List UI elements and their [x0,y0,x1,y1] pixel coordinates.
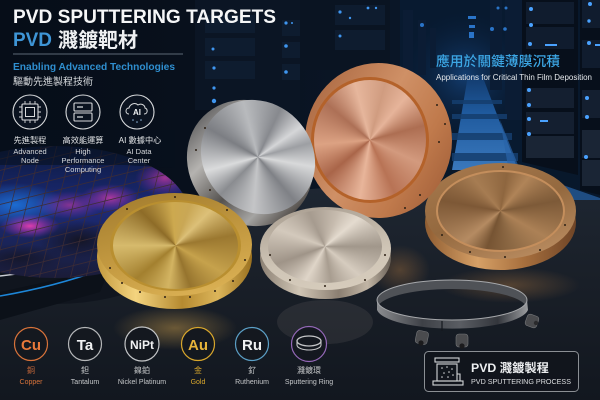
material: sputtering ring [285,326,333,386]
process badge: PVD SPUTTERING PROCESS [471,377,571,386]
material: sputtering ring: 濺鍍環 [297,365,321,375]
right racks [522,0,578,175]
label: AI data center: AI 數據中心 [119,135,161,145]
icon: sputtering chamber [433,358,463,385]
title [13,6,276,52]
process badge: PVD 濺鍍製程 [471,360,549,375]
material: copper: Copper [20,379,43,386]
bolt holes [109,104,566,298]
material: ruthenium [235,328,269,386]
material: nickel platinum: NiPt [130,338,154,352]
icon: AI data center [120,95,154,129]
floor [0,180,600,400]
material: nickel platinum: Nickel Platinum [118,379,166,386]
corridor [400,0,530,170]
subtitle [13,61,175,88]
subtitle: Enabling Advanced Technologies [13,61,175,73]
material: gold: 金 [194,365,202,375]
sputtering ring [377,280,540,349]
title: PVD [13,30,52,51]
label: AI data center: AI Data [126,147,152,156]
material: gold: Au [188,337,208,354]
material: ruthenium: Ruthenium [235,379,269,386]
material: tantalum: Ta [77,337,94,354]
material: gold [182,328,214,386]
wafer platform [0,148,197,304]
label: advanced node: Node [21,156,39,165]
material: sputtering ring: Sputtering Ring [285,379,333,386]
label: advanced node: 先進製程 [14,135,46,145]
material: ruthenium: 釕 [248,365,256,375]
label: advanced node [13,135,47,165]
label: advanced node: Advanced [13,147,47,156]
process badge [424,352,578,392]
label: AI data center: Center [128,156,151,165]
title: 濺鍍靶材 [58,28,138,52]
title: PVD SPUTTERING TARGETS [13,6,276,28]
material: copper [14,328,48,386]
icon: advanced node [13,95,47,129]
applications heading: Applications for Critical Thin Film Deposition [436,73,592,82]
label: high performance computing: Performance [62,156,104,165]
label: high performance computing: High [75,147,91,156]
label: high performance computing [62,135,104,174]
material: tantalum: 鉭 [81,365,89,375]
material: tantalum: Tantalum [71,379,99,386]
subtitle: 驅動先進製程技術 [13,75,93,88]
icon: high performance computing [66,95,100,129]
material: gold: Gold [191,379,205,386]
material: nickel platinum: 鎳鉑 [134,365,150,375]
label: high performance computing: 高效能運算 [63,135,103,145]
label: high performance computing: Computing [65,165,101,174]
label: AI data center [119,135,161,165]
material: ruthenium: Ru [242,337,262,354]
applications heading: 應用於關鍵薄膜沉積 [436,53,560,69]
material: nickel platinum [118,327,166,386]
wafer [0,146,182,278]
material: copper: 銅 [27,365,35,375]
material: copper: Cu [21,337,41,354]
applications heading [436,53,592,82]
icon: AI data center: AI [133,108,141,117]
racks behind [195,0,300,110]
material: tantalum [68,328,102,386]
